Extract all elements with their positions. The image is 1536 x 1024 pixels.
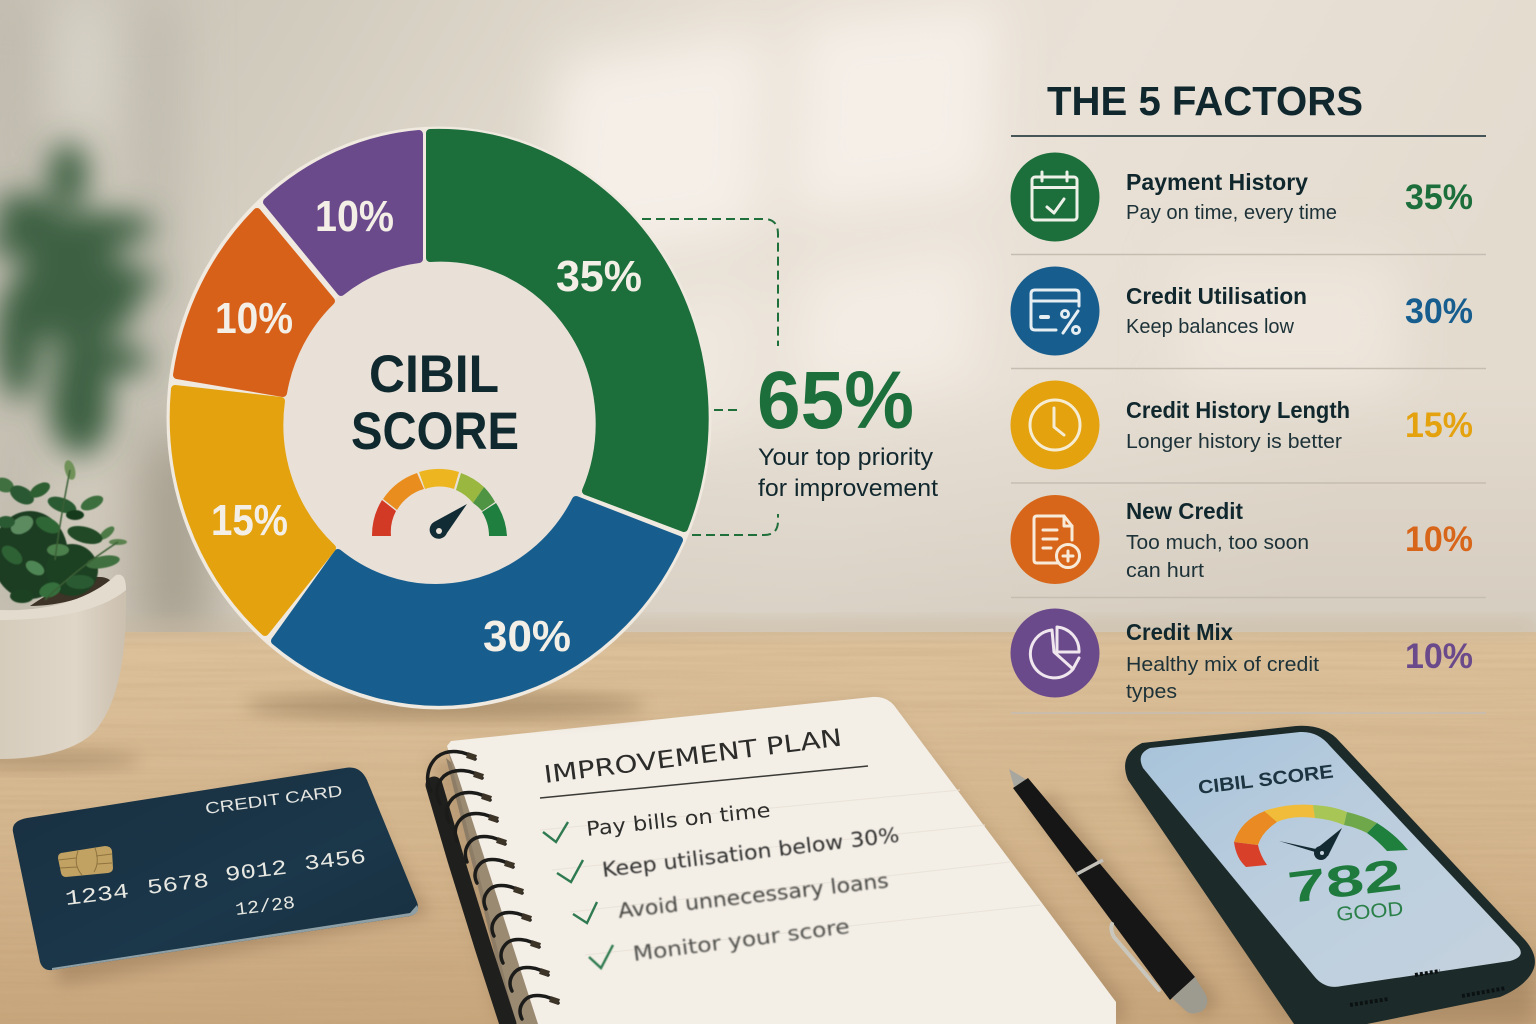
checklist bbox=[543, 798, 900, 968]
centre title: SCORE bbox=[351, 402, 519, 461]
callout: 65% top priority: Your top priority bbox=[758, 444, 933, 471]
card number: 3456 bbox=[303, 847, 367, 877]
smartphone bbox=[1120, 726, 1536, 1024]
callout: 65% top priority: 65% bbox=[757, 355, 914, 446]
callout: 65% top priority: for improvement bbox=[758, 475, 938, 502]
checklist: Monitor your score bbox=[632, 914, 851, 966]
pen bbox=[1009, 769, 1210, 1014]
row value: 30% bbox=[1405, 292, 1473, 331]
card number: 1234 bbox=[64, 881, 130, 912]
icon: document plus bbox=[1010, 495, 1100, 584]
row value: 15% bbox=[1405, 406, 1473, 445]
checklist: Pay bills on time bbox=[585, 798, 772, 841]
factor row: credit history length: Longer history is better bbox=[1126, 431, 1342, 453]
spiral binding bbox=[428, 751, 559, 1019]
checklist: Keep utilisation below 30% bbox=[601, 823, 900, 882]
factor row: new credit: Too much, too soon bbox=[1126, 532, 1309, 554]
row text: Credit Utilisation bbox=[1126, 283, 1307, 309]
donut labels: 30% bbox=[483, 612, 571, 661]
row text: Credit Mix bbox=[1126, 619, 1233, 645]
factor row: new credit: can hurt bbox=[1126, 560, 1204, 582]
row text: Payment History bbox=[1126, 169, 1308, 195]
centre title: CIBIL bbox=[369, 345, 499, 404]
donut labels bbox=[211, 192, 642, 661]
row value: 10% bbox=[1405, 520, 1473, 559]
notebook bbox=[428, 697, 1125, 1024]
gauge needle bbox=[1279, 828, 1342, 857]
callout connector bbox=[642, 219, 778, 535]
factor row: payment history: Pay on time, every time bbox=[1126, 202, 1337, 224]
phone score: 782 bbox=[1285, 850, 1404, 913]
donut chart bbox=[166, 126, 712, 720]
notebook page bbox=[447, 697, 1116, 1024]
donut centre disc bbox=[280, 259, 596, 589]
row text: New Credit bbox=[1126, 498, 1243, 524]
credit card bbox=[13, 768, 430, 985]
donut labels: 35% bbox=[556, 252, 642, 301]
card expiry: 12/28 bbox=[234, 894, 296, 921]
callout: 65% top priority bbox=[757, 355, 938, 502]
row value: 35% bbox=[1405, 178, 1473, 217]
notebook heading: IMPROVEMENT PLAN bbox=[542, 724, 843, 789]
factor row: credit utilisation bbox=[1010, 266, 1473, 356]
background: wooden table bbox=[0, 620, 1536, 1024]
factor row: credit utilisation: Keep balances low bbox=[1126, 316, 1295, 338]
background: wall with window light bbox=[0, 0, 1536, 660]
centre title bbox=[351, 345, 519, 461]
phone rating: GOOD bbox=[1336, 898, 1404, 926]
donut labels: 15% bbox=[211, 496, 288, 545]
notebook spine bbox=[446, 758, 538, 1024]
donut backing bbox=[166, 126, 712, 710]
background: blurred houseplant bbox=[0, 143, 160, 455]
icon: clock bbox=[1010, 380, 1100, 470]
icon: card percent bbox=[1010, 266, 1100, 356]
factor row: credit mix bbox=[1010, 608, 1473, 703]
segment 10% purple bbox=[267, 134, 419, 292]
donut labels: 10% bbox=[215, 294, 293, 343]
factor row: payment history bbox=[1010, 152, 1473, 242]
icon: calendar check bbox=[1010, 152, 1100, 242]
phone screen bbox=[1141, 732, 1521, 987]
segment 10% orange bbox=[177, 212, 331, 393]
factor row: credit mix: Healthy mix of credit bbox=[1126, 654, 1319, 676]
card number: 5678 bbox=[146, 871, 210, 901]
segment 15% yellow bbox=[174, 389, 332, 632]
segment 35% green bbox=[430, 133, 705, 528]
checklist: Avoid unnecessary loans bbox=[617, 868, 890, 923]
donut shadow bbox=[245, 692, 645, 720]
phone title: CIBIL SCORE bbox=[1197, 762, 1335, 799]
card chip bbox=[58, 846, 113, 877]
phone gauge bbox=[1234, 805, 1408, 867]
panel heading: THE 5 FACTORS bbox=[1047, 78, 1363, 124]
potted plant bbox=[0, 459, 140, 769]
factor row: credit mix: types bbox=[1126, 681, 1177, 703]
phone body bbox=[1125, 726, 1535, 1024]
row value: 10% bbox=[1405, 637, 1473, 676]
card number: 9012 bbox=[224, 858, 288, 888]
factor row: credit history length bbox=[1010, 380, 1473, 470]
icon: pie chart bbox=[1010, 608, 1100, 698]
centre gauge bbox=[372, 469, 507, 539]
segment 30% blue bbox=[275, 500, 679, 702]
card label: CREDIT CARD bbox=[204, 783, 343, 818]
donut labels: 10% bbox=[315, 192, 394, 241]
factors panel bbox=[1010, 78, 1486, 713]
row text: Credit History Length bbox=[1126, 397, 1350, 423]
notebook coil back bbox=[434, 785, 508, 1024]
gauge needle bbox=[430, 504, 467, 539]
factor row: new credit bbox=[1010, 495, 1473, 584]
card number bbox=[64, 847, 367, 912]
